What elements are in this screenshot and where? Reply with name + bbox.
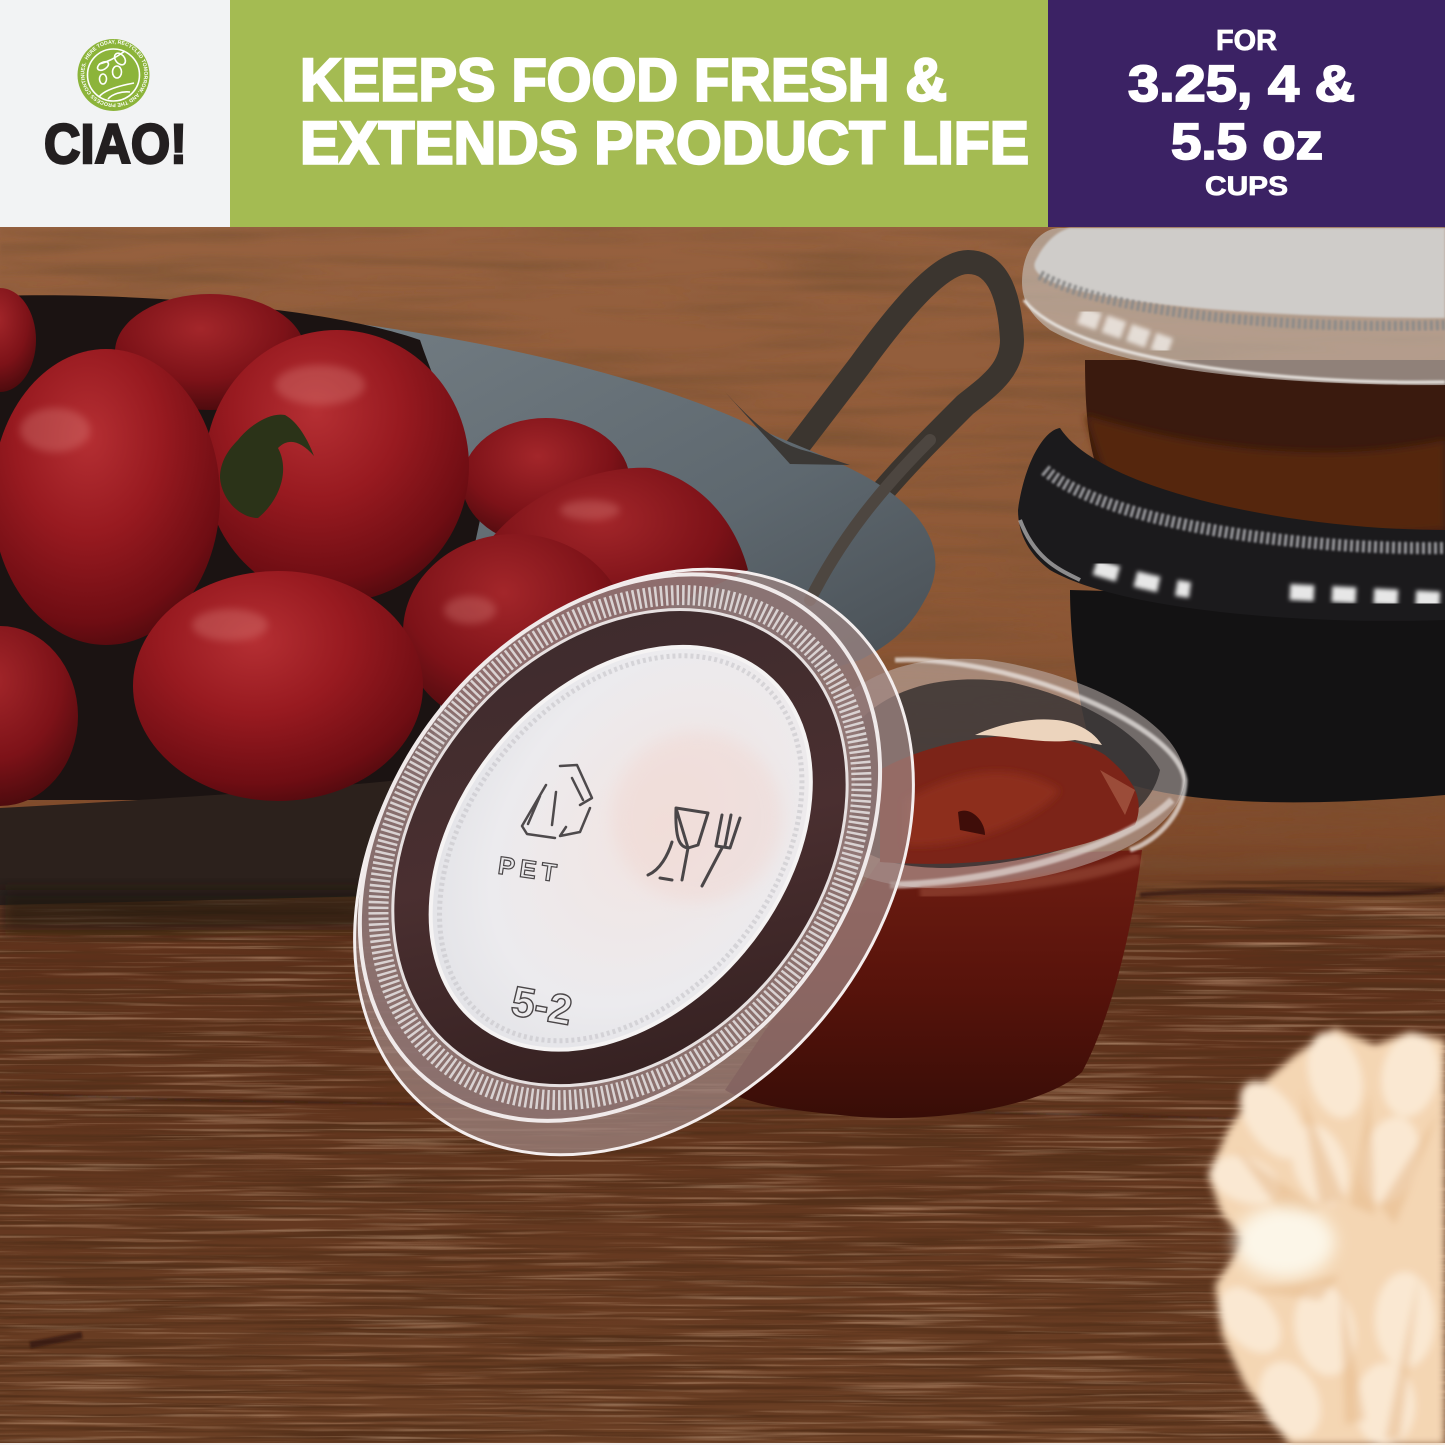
icon: recycling triangle [522,765,592,838]
lid embossed markings [496,765,740,1034]
sizes line 1: 3.25, 4 & [1128,55,1355,112]
icon: tomato stem [220,415,314,518]
icon: cup and fork [648,808,740,886]
mold number: 5-2 [508,977,576,1034]
brand name: CIAO! [44,112,187,175]
icon: ciao badge: HERE TODAY, RECYCLED TOMORROW. AND THE PROCESS CONTINUES. [80,40,148,108]
white disc [353,572,889,1124]
panel: headline [230,0,1048,227]
panel: logo [0,0,230,227]
lid outer rim [239,458,1029,1266]
photo: sauce cup [725,659,1185,1118]
label for: FOR [1216,25,1277,57]
photo: clear stacked cup [1022,228,1445,534]
panel: cup sizes [1048,0,1445,227]
ridged ring [279,499,961,1197]
photo: plate with handle [0,262,1012,930]
photo: tomatoes [0,288,748,806]
label cups: CUPS [1205,171,1288,201]
photo: peach flower [1204,1026,1445,1445]
headline line 2: EXTENDS PRODUCT LIFE [300,110,1029,176]
PET label: PET [496,852,563,888]
sizes line 2: 5.5 oz [1171,113,1323,170]
photo: black stacked cup [1018,428,1445,802]
photo: clear lid [239,457,1029,1266]
headline line 1: KEEPS FOOD FRESH & [300,46,947,114]
